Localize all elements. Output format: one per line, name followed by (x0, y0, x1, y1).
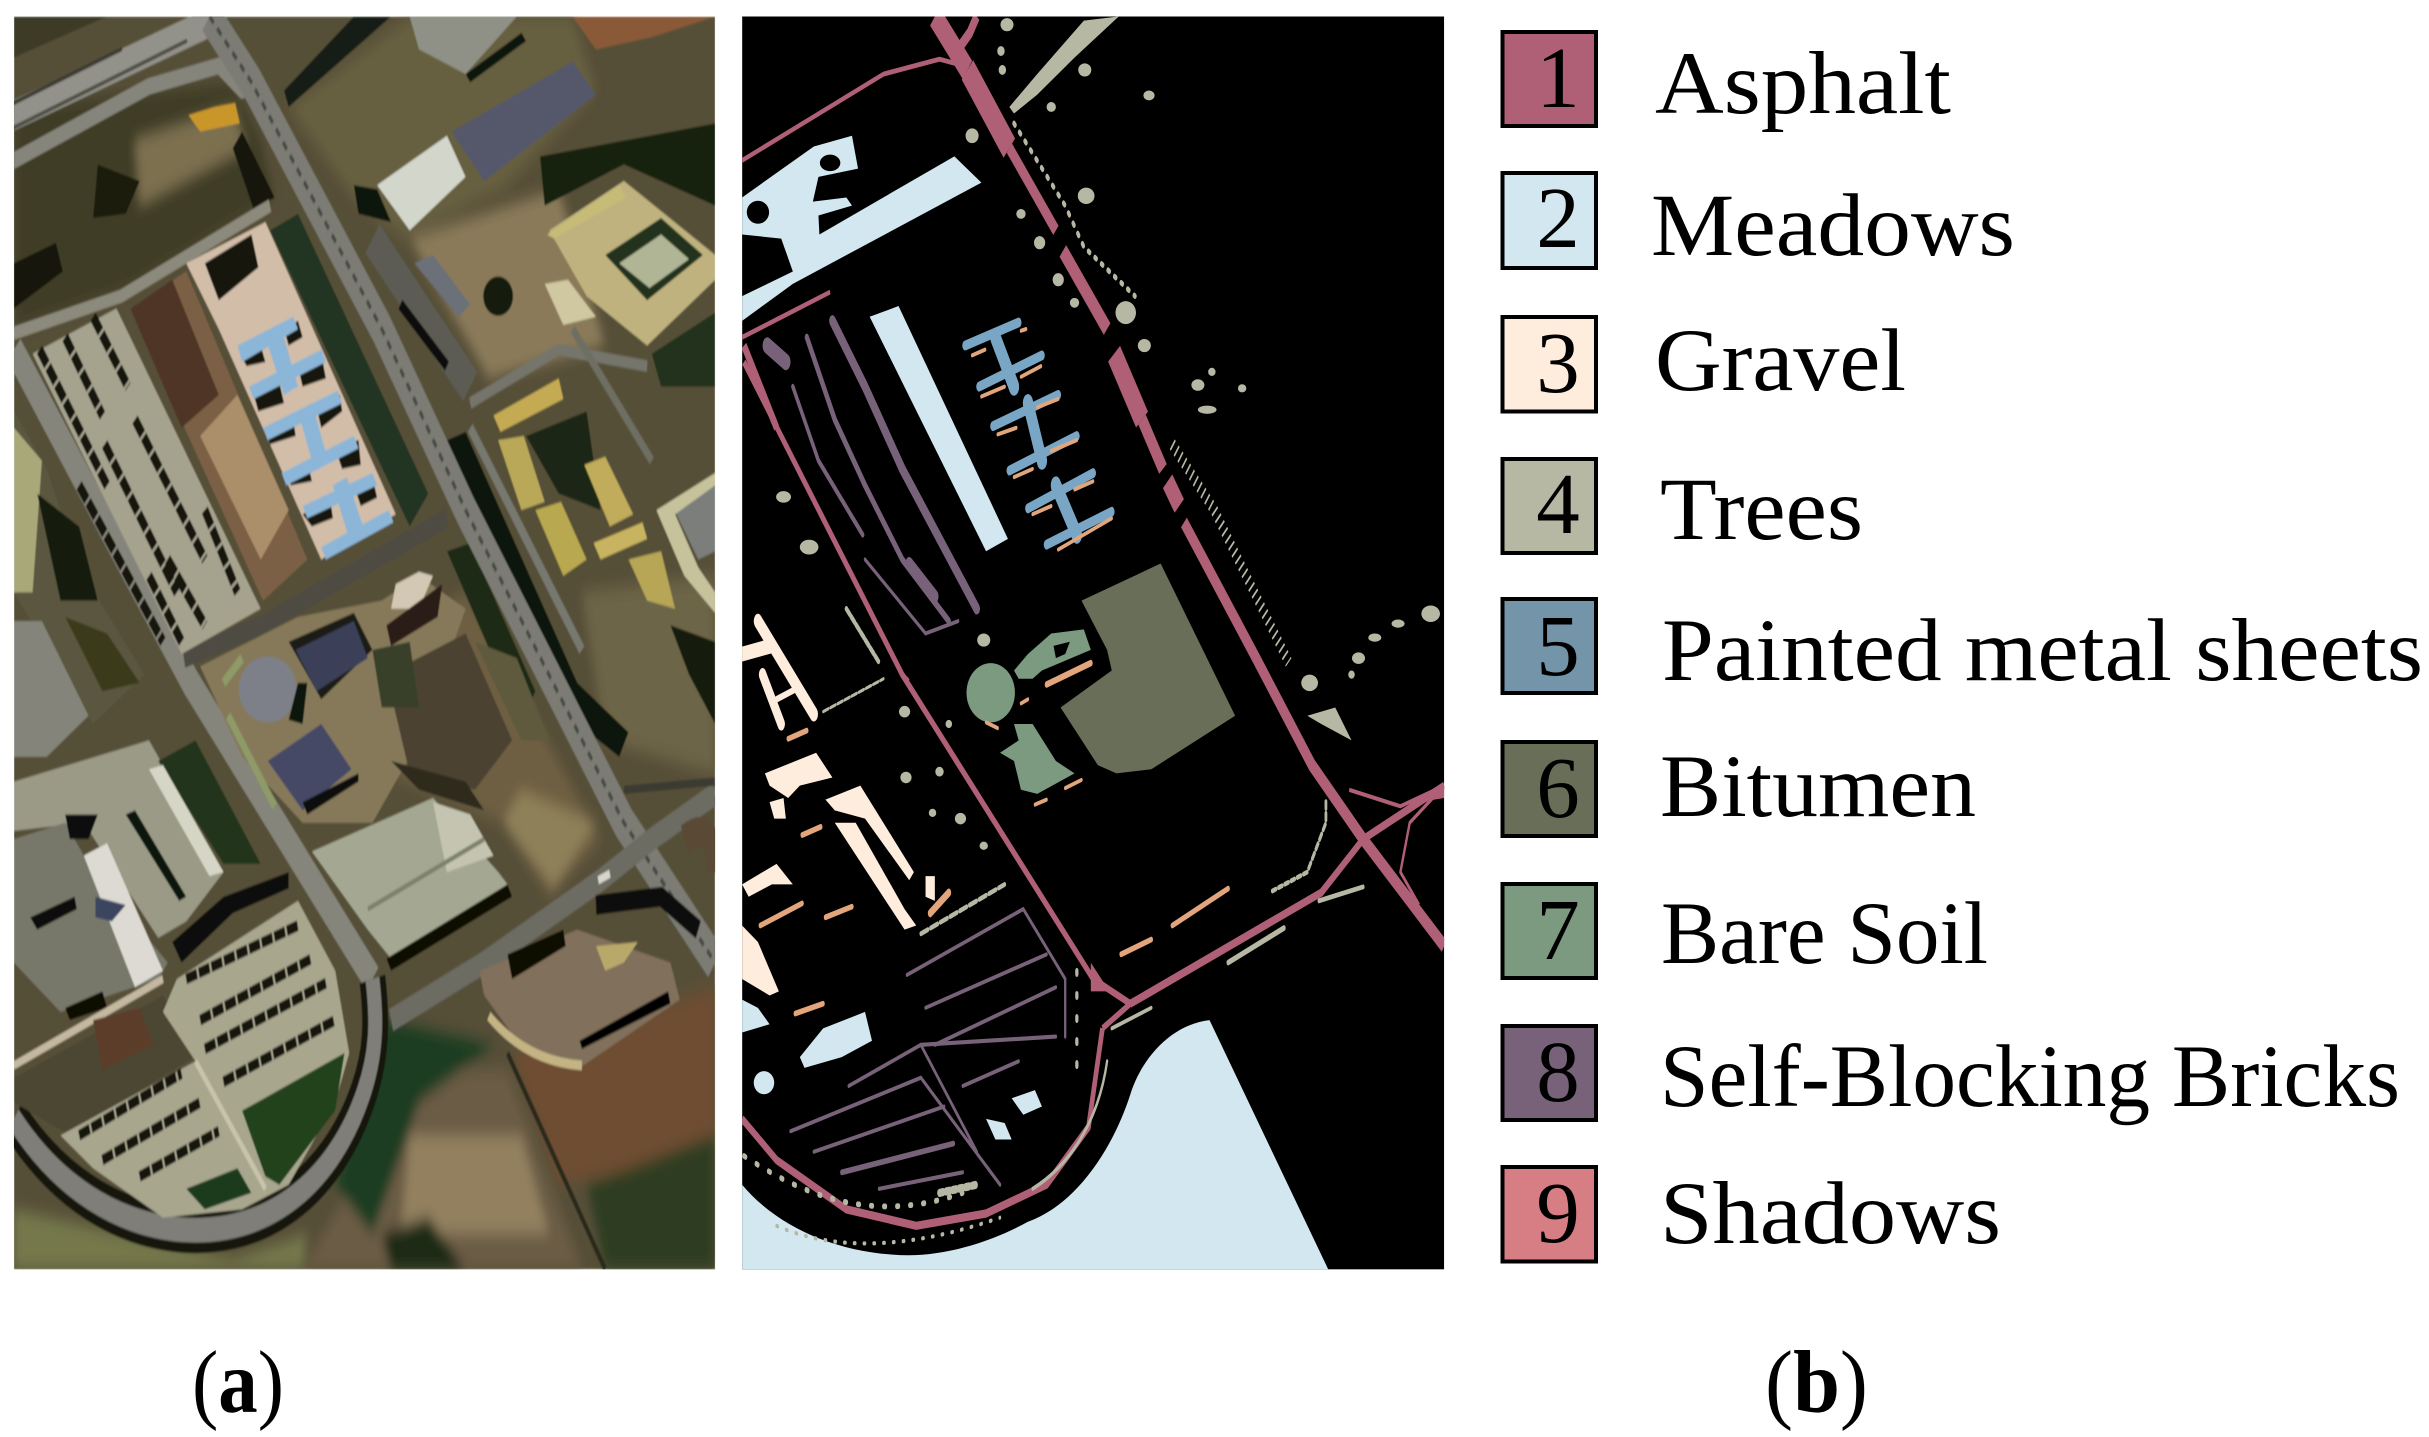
left parking lot (33, 309, 261, 654)
yellow buildings (493, 378, 715, 613)
legend swatch 3 (1502, 317, 1596, 412)
legend swatch 5 (1502, 599, 1596, 693)
legend number 7: 7 (1536, 881, 1580, 978)
class 6: bitumen (1061, 564, 1235, 773)
legend label: Trees: Trees (1660, 461, 1863, 559)
legend label: Painted metal sheets: Painted metal sheets (1662, 602, 2423, 700)
legend swatch 4 (1502, 459, 1596, 553)
class 3: gravel (742, 621, 935, 995)
large grey-green warehouse (312, 798, 512, 971)
south-east building (480, 930, 680, 1269)
blue-roof building (186, 222, 396, 559)
dark tree strips (270, 214, 715, 757)
legend label: Bare Soil: Bare Soil (1661, 885, 1988, 983)
legend swatch 6 (1502, 742, 1596, 836)
legend label: Self-Blocking Bricks: Self-Blocking Bricks (1660, 1028, 2400, 1126)
caption (b): (b) (1765, 1334, 1868, 1432)
class 5: painted metal sheets (965, 322, 1112, 545)
class 1: asphalt roads (742, 16, 1444, 1226)
legend label: Bitumen: Bitumen (1660, 738, 1976, 836)
brown field (172, 271, 308, 601)
class 4: trees (776, 16, 1440, 850)
legend (1502, 29, 2423, 1263)
legend number 9: 9 (1536, 1164, 1580, 1261)
caption (a): (a) (192, 1334, 284, 1432)
legend swatch 2 (1502, 173, 1596, 268)
road junction east (596, 832, 715, 930)
legend label: Shadows: Shadows (1660, 1165, 2001, 1263)
legend label: Asphalt: Asphalt (1655, 35, 1951, 133)
legend swatch 9 (1502, 1167, 1596, 1262)
legend number 2: 2 (1536, 169, 1580, 266)
legend number 5: 5 (1536, 597, 1580, 694)
legend number 4: 4 (1536, 455, 1580, 552)
gravel-orange strips (760, 329, 1228, 1014)
legend number 3: 3 (1536, 314, 1580, 411)
legend number 1: 1 (1536, 29, 1580, 126)
legend number 8: 8 (1536, 1023, 1580, 1120)
class 8: self-blocking bricks (767, 321, 1065, 1189)
panel: aerial image (a) (14, 16, 716, 1270)
legend swatch 8 (1502, 1026, 1596, 1120)
central blue-grey buildings and mottled ground (200, 572, 549, 823)
legend swatch 7 (1502, 884, 1596, 978)
panel: classification map (b) (742, 16, 1444, 1270)
field with orange patch, top left (14, 103, 275, 309)
class 7: bare soil (967, 629, 1091, 794)
highway lanes at top-left (14, 16, 242, 160)
legend label: Meadows: Meadows (1651, 177, 2015, 275)
south parking lot (61, 901, 349, 1218)
class 2: meadows regions (742, 136, 1328, 1269)
main roads (14, 16, 715, 1230)
legend label: Gravel: Gravel (1655, 312, 1906, 410)
top-right buildings (284, 16, 715, 387)
legend swatch 1 (1502, 32, 1596, 126)
west campus buildings (14, 411, 289, 1135)
legend number 6: 6 (1536, 739, 1580, 836)
